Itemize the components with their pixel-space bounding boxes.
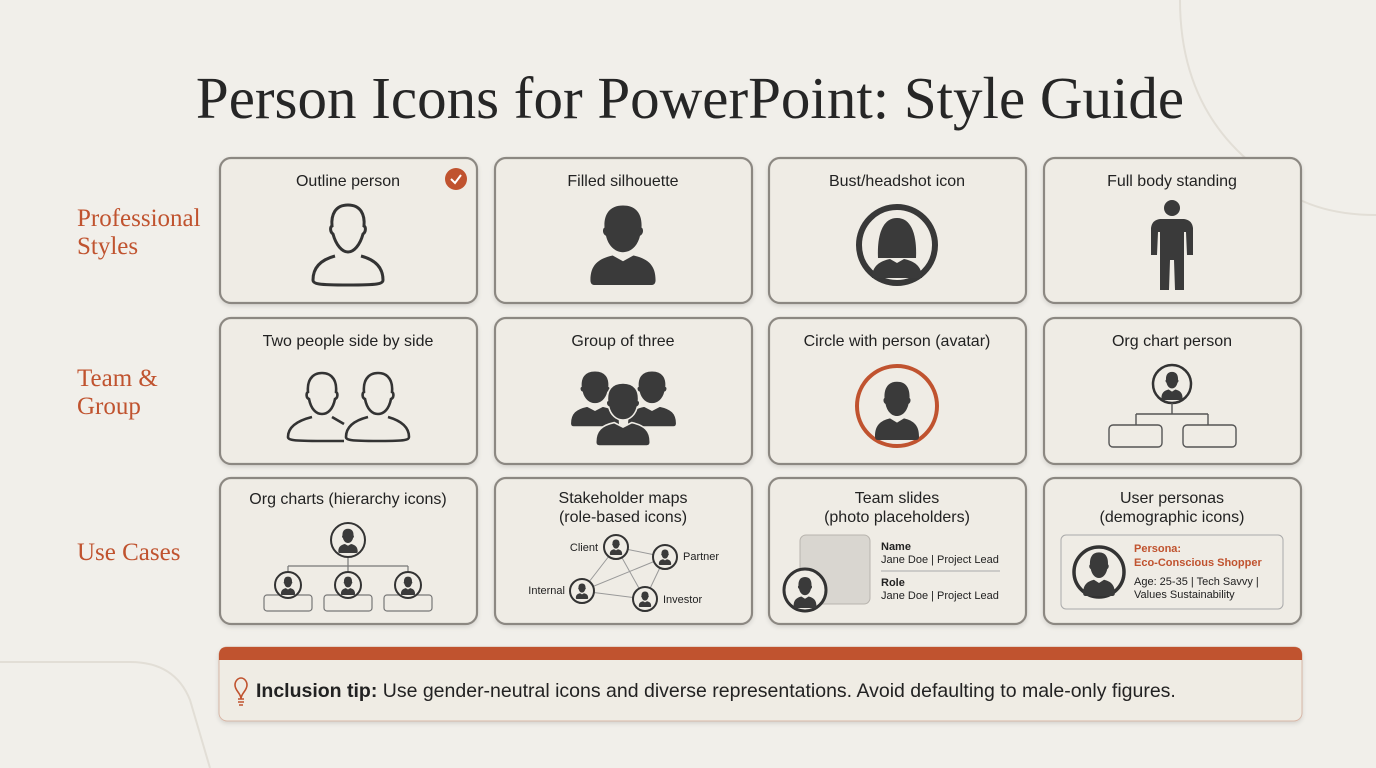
- card: Outline person: [296, 168, 467, 285]
- persona text: Values Sustainability: [1134, 589, 1235, 601]
- card: Full body: [1107, 173, 1237, 290]
- name/role text: Jane Doe | Project Lead: [881, 590, 999, 602]
- persona text: Persona:: [1134, 543, 1181, 555]
- card: Two people: Two people side by side: [263, 333, 433, 350]
- icon: standing person: [1151, 200, 1193, 290]
- icon: network: Internal: [528, 585, 565, 597]
- icon: lightbulb: [235, 678, 247, 705]
- card: Circle avatar: Circle with person (avatar): [804, 333, 990, 350]
- card: Org chart person: Org chart person: [1112, 333, 1232, 350]
- row label: Team & Group: Team &: [77, 365, 158, 392]
- card: Team slides: [784, 490, 1000, 611]
- icon: avatar: [784, 569, 826, 611]
- card: User personas: [1061, 490, 1283, 609]
- card: Org charts hierarchy: Org charts (hierarchy icons): [249, 491, 447, 508]
- persona text: Age: 25-35 | Tech Savvy |: [1134, 576, 1259, 588]
- persona box: [1061, 535, 1283, 609]
- name/role text: Name: [881, 541, 911, 553]
- icon: hierarchy: [264, 523, 432, 611]
- card: Circle avatar: [804, 333, 990, 446]
- row label: Team & Group: Group: [77, 393, 141, 420]
- icon: check badge: [445, 168, 467, 190]
- icon: network: Client: [570, 542, 598, 554]
- icon: filled person: [590, 205, 656, 285]
- row label: Professional Styles: Styles: [77, 233, 138, 260]
- tip text: Inclusion tip: Use gender-neutral icons and diverse representations. Avoid defaulting to male-only figures.: [256, 680, 1176, 702]
- card: Bust/headshot: Bust/headshot icon: [829, 173, 965, 190]
- card: Team slides: (photo placeholders): [824, 509, 970, 526]
- name/role text: [881, 541, 1000, 602]
- icon: outline person: [313, 205, 383, 285]
- card: Team slides: Team slides: [855, 490, 939, 507]
- name/role text: Jane Doe | Project Lead: [881, 554, 999, 566]
- card: User personas: (demographic icons): [1100, 509, 1244, 526]
- row label: Use Cases: Use Cases: [77, 539, 180, 566]
- card: Bust/headshot: [829, 173, 965, 283]
- photo placeholder: [800, 535, 870, 604]
- card: User personas: User personas: [1120, 490, 1224, 507]
- card: Org chart person: [1109, 333, 1236, 447]
- icon: network: Investor: [663, 594, 702, 606]
- card: Filled silhouette: Filled silhouette: [567, 173, 679, 190]
- card: Filled silhouette: [567, 173, 679, 285]
- persona text: Eco-Conscious Shopper: [1134, 557, 1262, 569]
- icon: group: [570, 371, 677, 446]
- name/role text: Role: [881, 577, 905, 589]
- icon: two outline people: [288, 373, 409, 441]
- icon: headshot circle: [859, 207, 935, 283]
- inclusion tip banner: [219, 647, 1302, 721]
- title: Person Icons for PowerPoint: Style Guide: [196, 65, 1184, 131]
- card: Org charts hierarchy: [249, 491, 447, 611]
- icon: network: Partner: [683, 551, 719, 563]
- icon: org chart mini: [1109, 365, 1236, 447]
- card: Stakeholder maps: (role-based icons): [559, 509, 687, 526]
- icon: avatar circle: [857, 366, 937, 446]
- icon: network: [528, 535, 719, 611]
- row label: Professional Styles: Professional: [77, 205, 201, 232]
- card: Full body: Full body standing: [1107, 173, 1237, 190]
- card: Group of three: Group of three: [571, 333, 675, 350]
- card: Two people: [263, 333, 433, 441]
- persona text: [1134, 543, 1262, 601]
- card: Stakeholder maps: Stakeholder maps: [559, 490, 687, 507]
- card: Group of three: [570, 333, 677, 446]
- card: Stakeholder maps: [528, 490, 719, 611]
- icon: persona avatar: [1074, 547, 1124, 597]
- card: Outline person: Outline person: [296, 173, 400, 190]
